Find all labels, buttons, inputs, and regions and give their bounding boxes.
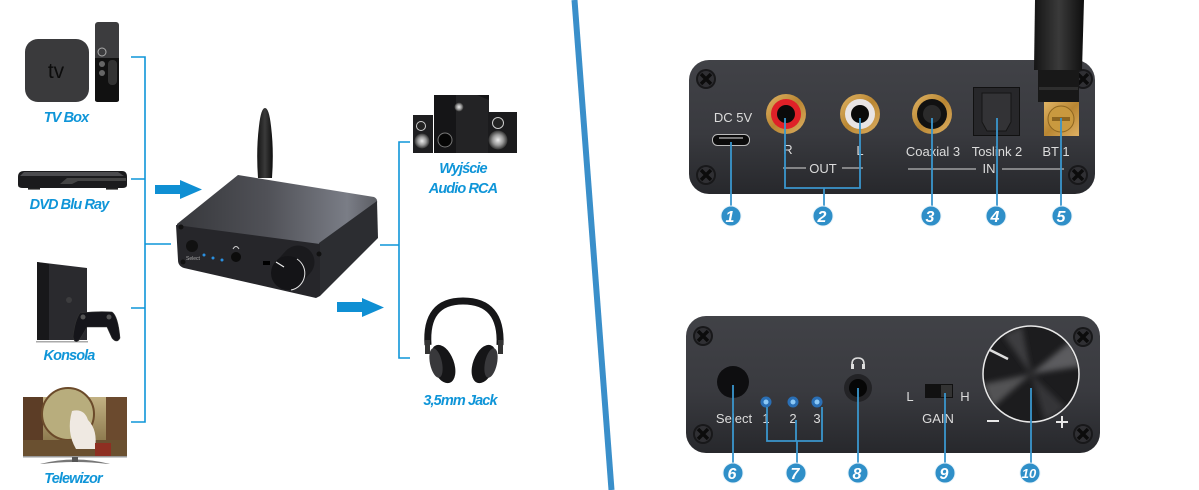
labels: L [906, 389, 914, 404]
leaders: front [733, 385, 1031, 465]
port labels: Toslink 2 [972, 144, 1022, 159]
port labels: BT 1 [1042, 144, 1070, 159]
port labels: OUT [809, 161, 837, 176]
label: Wyjście Audio RCA: Wyjście [439, 161, 488, 177]
labels: 2 [789, 411, 797, 426]
badge 8 [848, 463, 868, 483]
label: Wyjście Audio RCA: Audio RCA [428, 181, 498, 197]
panel: front view [686, 316, 1100, 453]
device: DAC amplifier [176, 108, 378, 298]
icon: headphones [425, 301, 503, 387]
icon: headphones symbol [851, 358, 865, 369]
antenna [257, 108, 273, 178]
badge 4: 4 [990, 209, 1000, 226]
icon: game console [36, 262, 120, 342]
arrow: input [155, 180, 202, 199]
badge 1 [721, 206, 741, 226]
icon: DVD player [18, 171, 127, 190]
port labels: Coaxial 3 [906, 144, 960, 159]
arrow: output [337, 298, 384, 317]
antenna [1034, 0, 1084, 136]
icon: TV Box [25, 22, 119, 102]
panel: rear view [689, 60, 1095, 194]
badge 2: 2 [817, 209, 827, 226]
Toslink port [974, 88, 1020, 136]
label: Wyjście Audio RCA [428, 161, 498, 197]
RCA L [840, 94, 880, 134]
RCA R [766, 94, 806, 134]
badge 2 [813, 206, 833, 226]
badge 6: 6 [728, 466, 737, 483]
label: TV Box: TV Box [44, 110, 90, 126]
labels [716, 389, 970, 426]
badge 5: 5 [1057, 209, 1067, 226]
label: Konsola: Konsola [44, 348, 95, 364]
headphone jack [844, 374, 872, 402]
output bracket [380, 142, 410, 358]
BT gold connector [1044, 102, 1079, 136]
port labels [783, 142, 1070, 176]
right face [319, 201, 378, 296]
input bracket [131, 57, 171, 422]
DC 5V label: DC 5V [714, 110, 752, 125]
badge 3 [921, 206, 941, 226]
badge 9 [935, 463, 955, 483]
badge 5 [1052, 206, 1072, 226]
badge 6 [723, 463, 743, 483]
leaders: rear [731, 118, 1061, 208]
badge 10 [1020, 463, 1040, 483]
port labels: IN [982, 161, 996, 176]
micro USB port [712, 134, 750, 146]
icon: speakers [413, 95, 517, 153]
top surface [177, 175, 377, 246]
labels: 1 [762, 411, 770, 426]
label: DVD Blu Ray: DVD Blu Ray [30, 197, 110, 213]
badge 10: 10 [1022, 466, 1037, 481]
badge 7 [786, 463, 806, 483]
LEDs [760, 396, 822, 408]
labels: GAIN [922, 411, 954, 426]
minus and plus [987, 416, 1068, 428]
badge 4 [986, 206, 1006, 226]
badge 8: 8 [853, 466, 862, 483]
device: DAC amplifier: Select [186, 256, 201, 262]
front face [176, 225, 320, 298]
label: Telewizor: Telewizor [44, 471, 104, 487]
badge 1: 1 [726, 209, 735, 226]
divider line [574, 0, 612, 490]
icon: television [23, 388, 127, 464]
coaxial port [912, 94, 952, 134]
volume knob [271, 256, 305, 290]
volume knob [983, 326, 1082, 422]
badge 3: 3 [926, 209, 935, 226]
labels: 3 [813, 411, 821, 426]
port labels: L [856, 143, 864, 158]
labels: Select [716, 411, 752, 426]
badge 7: 7 [791, 466, 801, 483]
label: 3,5mm Jack: 3,5mm Jack [423, 393, 498, 409]
labels: H [960, 389, 970, 404]
icon: TV Box: tv [48, 60, 65, 83]
badge 9: 9 [940, 466, 949, 483]
gain switch [925, 384, 953, 398]
port labels: R [783, 142, 793, 157]
select button [717, 366, 749, 398]
